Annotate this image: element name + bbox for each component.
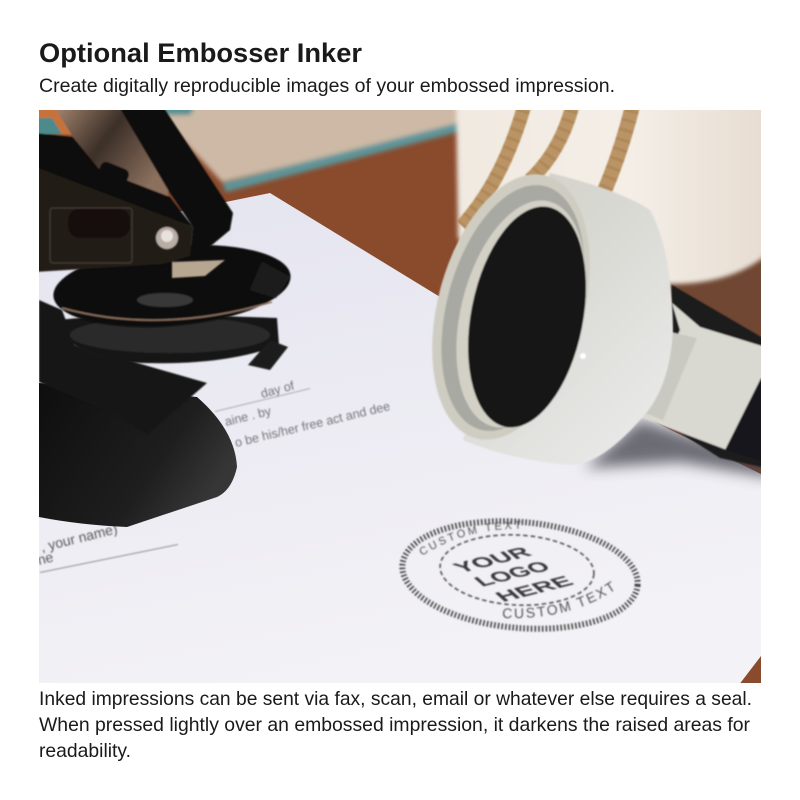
title: Optional Embosser Inker (39, 38, 362, 68)
embosser arm (39, 299, 208, 397)
logo text (452, 546, 574, 602)
tick ring (398, 512, 642, 638)
logo text: HERE (491, 573, 579, 605)
embosser base dome (39, 383, 237, 527)
inker cast shadow (585, 420, 775, 478)
description paragraph: readability. (39, 740, 131, 762)
book on table (164, 110, 460, 194)
stamp handle (642, 284, 761, 468)
description paragraph (39, 688, 752, 762)
printed document text: aine . by (223, 404, 273, 429)
subtitle: Create digitally reproducible images of your embossed impression. (39, 76, 615, 97)
inker cap (432, 173, 674, 465)
lower die disc (60, 315, 288, 370)
custom text bottom: CUSTOM TEXT (502, 580, 614, 620)
white cylinder with rope (456, 100, 770, 286)
black ink pad (467, 206, 587, 428)
wood right of the cylinder (670, 258, 761, 337)
printed document text: ne (36, 549, 55, 568)
wood table (39, 110, 761, 683)
sheet of paper (39, 193, 761, 690)
logo text: LOGO (470, 559, 556, 590)
photo: embosser, inker and impression on paper (39, 110, 761, 683)
description paragraph: Inked impressions can be sent via fax, scan, email or whatever else requires a seal. (39, 688, 752, 710)
logo text: YOUR (449, 544, 537, 576)
upper die disc (52, 244, 292, 328)
embosser handle (35, 105, 233, 278)
printed document text: , your name) (39, 520, 119, 555)
printed document text (36, 378, 391, 573)
printed document text: day of (259, 378, 296, 401)
description paragraph: When pressed lightly over an embossed impression, it darkens the raised areas for (39, 714, 750, 736)
dashed inner ring (438, 531, 596, 609)
impression seal (398, 517, 642, 633)
printed document text: o be his/her free act and dee (233, 399, 391, 450)
custom text top: CUSTOM TEXT (418, 520, 522, 556)
